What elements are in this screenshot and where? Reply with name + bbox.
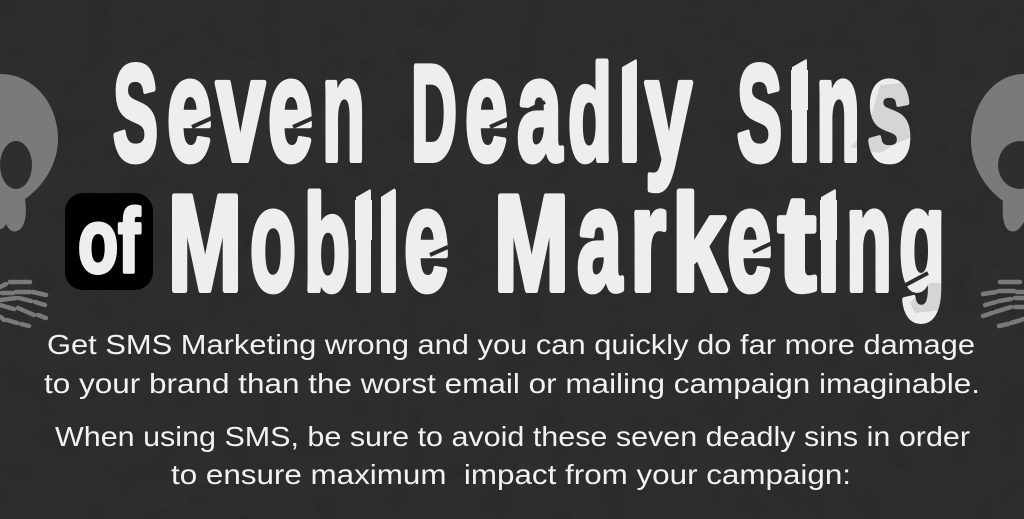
title line: Mobile Marketing: i <box>817 167 840 319</box>
title line: Mobile Marketing: e <box>404 158 449 321</box>
title line: Mobile Marketing: e <box>727 158 772 321</box>
title line: Seven Deadly Sins: i <box>788 37 811 189</box>
title line: Mobile Marketing: M <box>494 167 569 319</box>
intro paragraph: to your brand than the worst email or mailing campaign imaginable. <box>44 368 980 399</box>
icon: right skull <box>971 74 1024 231</box>
title line: Seven Deadly Sins: e <box>167 28 212 191</box>
title line: Mobile Marketing: l <box>377 167 400 319</box>
icon: left skeletal hand <box>0 282 46 326</box>
title line: Mobile Marketing: o <box>250 158 296 321</box>
title line: Seven Deadly Sins: n <box>322 28 365 191</box>
title line: Mobile Marketing: r <box>630 158 666 321</box>
title line: Seven Deadly Sins: D <box>411 37 457 189</box>
second paragraph: When using SMS, be sure to avoid these seven deadly sins in order <box>55 421 970 452</box>
title line: Mobile Marketing: k <box>672 167 726 319</box>
icon: left skull <box>0 74 58 231</box>
title line: Seven Deadly Sins: S <box>737 37 782 189</box>
title line: Seven Deadly Sins: S <box>113 37 158 189</box>
second paragraph <box>55 421 970 490</box>
title line: Seven Deadly Sins: e <box>268 28 313 191</box>
title line: Mobile Marketing <box>168 158 945 321</box>
title line: Seven Deadly Sins: a <box>517 28 563 191</box>
title letter details: slanted tops <box>351 52 837 200</box>
title letter details: diagonal slashes <box>192 102 928 288</box>
title line: Seven Deadly Sins: e <box>465 28 508 191</box>
title line: Mobile Marketing: a <box>577 158 623 321</box>
title line: Seven Deadly Sins: d <box>568 37 612 189</box>
title line: Seven Deadly Sins: y <box>645 28 692 191</box>
icon: right skeletal hand <box>983 282 1024 326</box>
title line: Seven Deadly Sins <box>113 28 912 191</box>
title line: Mobile Marketing: i <box>352 167 375 319</box>
badge: of: of <box>78 192 141 292</box>
title letter details: worn patches <box>850 82 944 313</box>
title letter details: joined i stems <box>355 70 837 240</box>
title line: Mobile Marketing: g <box>899 158 945 321</box>
title line: Seven Deadly Sins: v <box>216 28 265 191</box>
second paragraph: to ensure maximum impact from your campaign: <box>171 459 851 490</box>
title line: Mobile Marketing: t <box>778 167 816 319</box>
intro paragraph <box>44 329 980 399</box>
intro paragraph: Get SMS Marketing wrong and you can quickly do far more damage <box>47 329 975 360</box>
title line: Mobile Marketing: M <box>168 167 242 319</box>
title line: Seven Deadly Sins: s <box>867 28 912 191</box>
title <box>113 28 945 321</box>
title line: Seven Deadly Sins: l <box>618 37 641 189</box>
title line: Mobile Marketing: n <box>846 158 892 321</box>
title line: Seven Deadly Sins: n <box>816 28 860 191</box>
title line: Mobile Marketing: b <box>304 167 350 319</box>
